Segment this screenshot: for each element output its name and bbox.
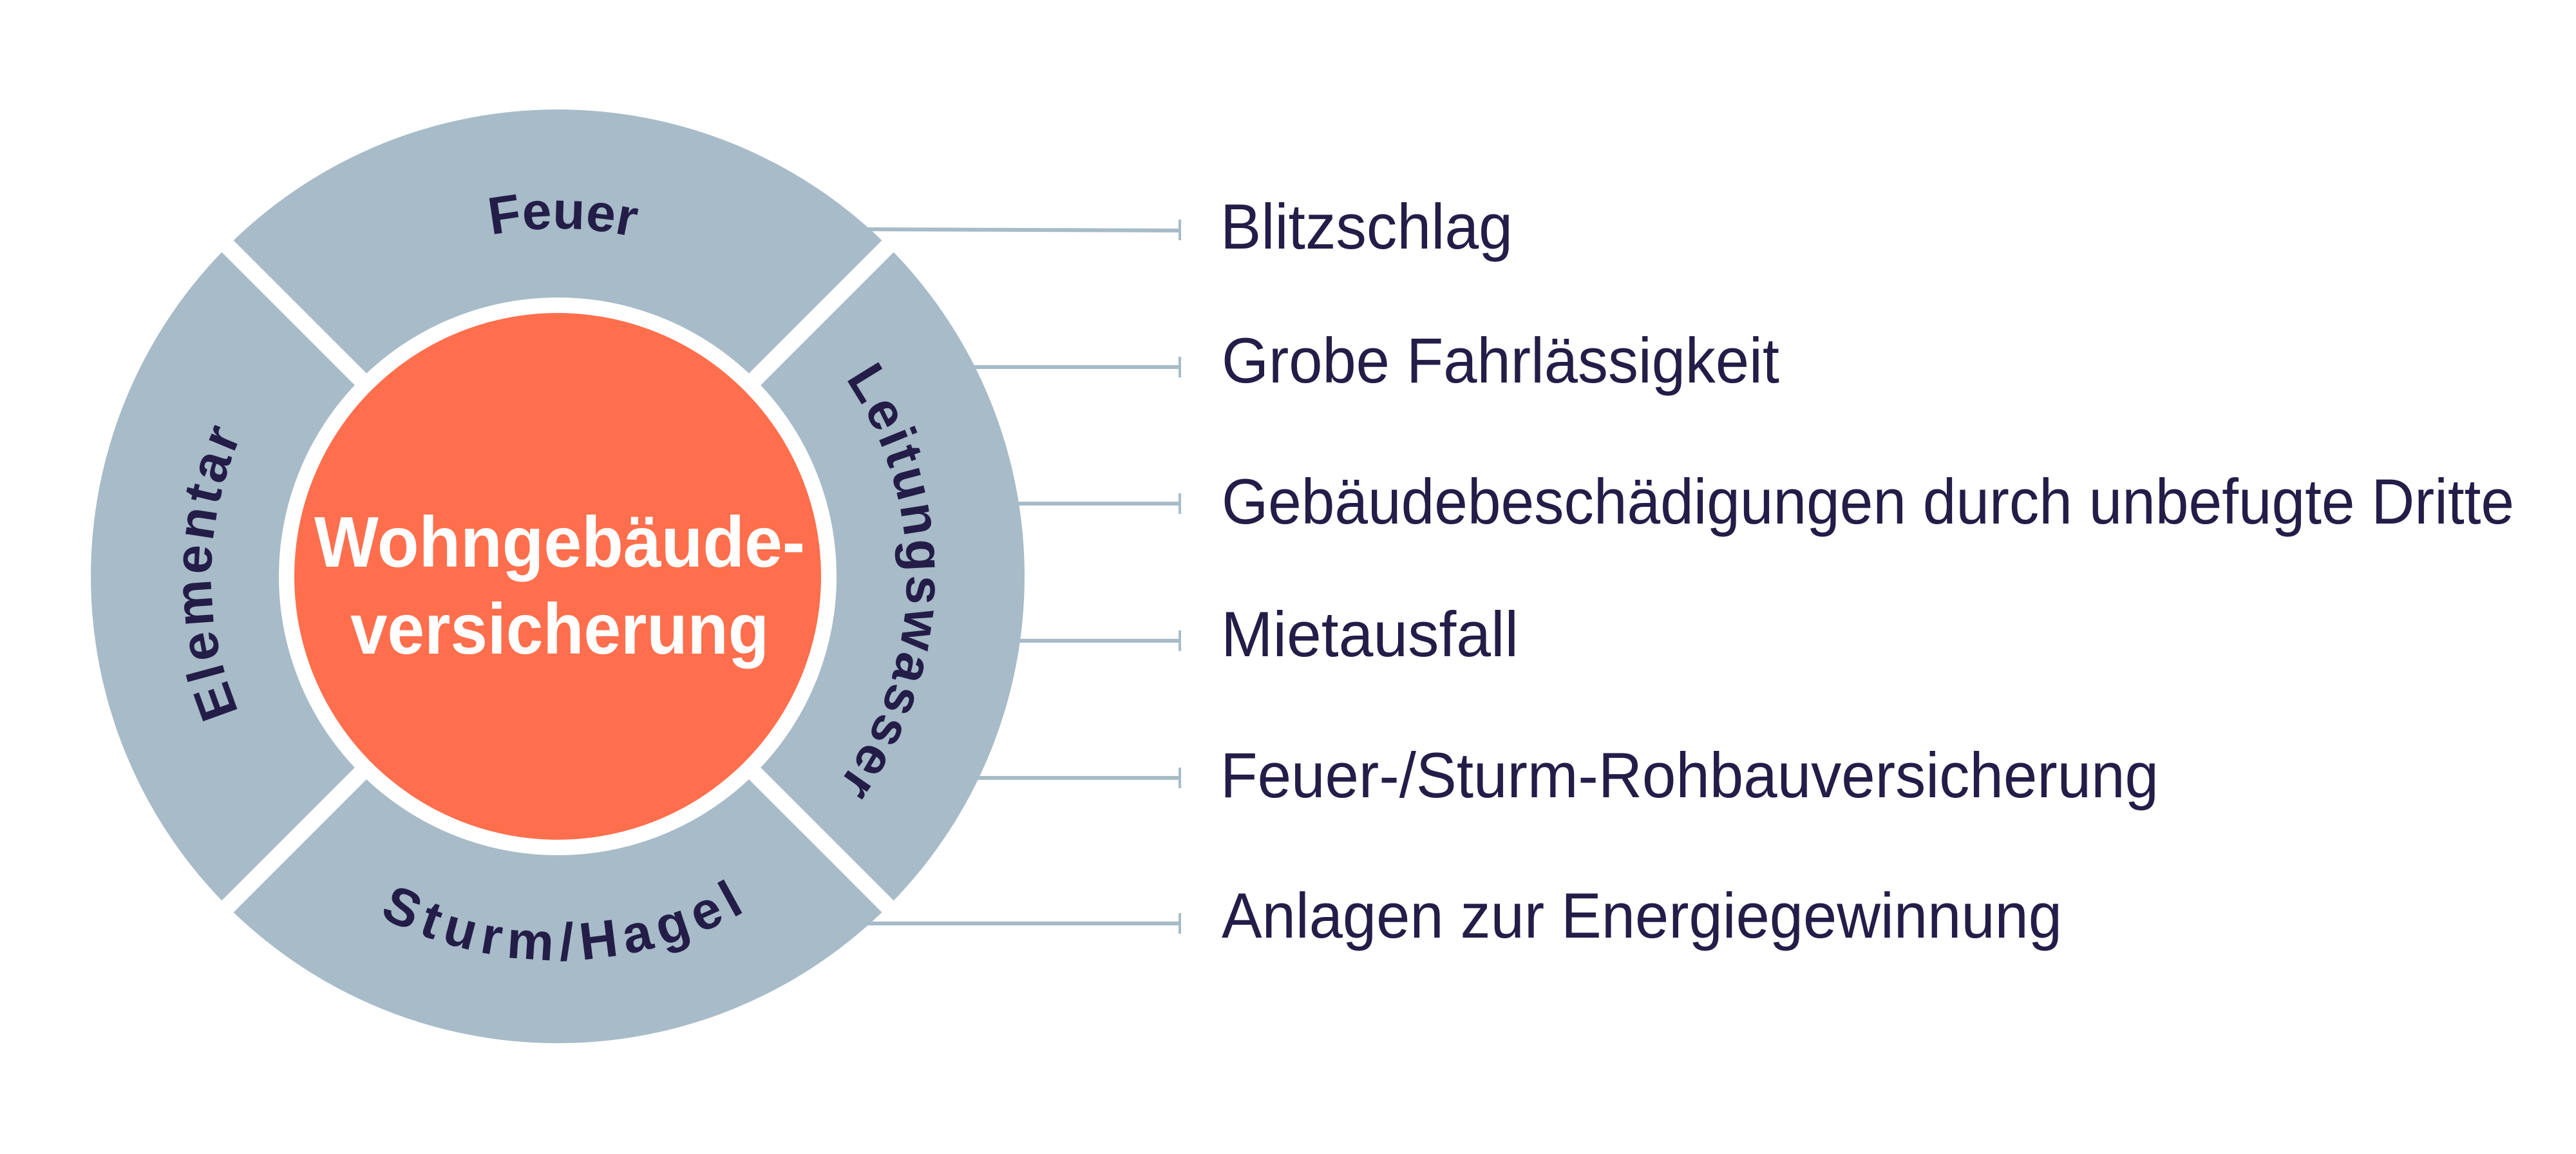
list item: Feuer-/Sturm-Rohbauversicherung: Feuer-/Sturm-Rohbauversicherung — [1220, 739, 2159, 811]
list item: Anlagen zur Energiegewinnung: Anlagen zur Energiegewinnung — [1222, 880, 2062, 951]
center title: versicherung — [350, 589, 769, 669]
ring segments — [91, 109, 1025, 1043]
segment: Elementar — [91, 252, 355, 900]
list item: Gebäudebeschädigungen durch unbefugte Dritte: Gebäudebeschädigungen durch unbefugte Dritte — [1222, 466, 2514, 537]
connector: Blitzschlag — [857, 220, 1181, 240]
coverage list — [1220, 191, 2514, 951]
connector: Gebäudebeschädigungen — [1011, 493, 1181, 514]
connector lines — [857, 220, 1181, 934]
connector: Grobe Fahrlässigkeit — [966, 357, 1181, 377]
center title — [314, 502, 805, 669]
list item: Grobe Fahrlässigkeit: Grobe Fahrlässigkeit — [1222, 325, 1779, 396]
ring label: Leitungswasser: Leitungswasser — [844, 362, 935, 800]
segment: Feuer — [234, 109, 882, 374]
center title: Wohngebäude- — [314, 502, 805, 582]
list item: Blitzschlag: Blitzschlag — [1220, 191, 1513, 262]
connector: Anlagen zur Energiegewinnung — [857, 913, 1181, 934]
segment: Sturm/Hagel — [234, 779, 882, 1043]
ring label: Feuer: Feuer — [489, 194, 639, 235]
center circle — [294, 313, 821, 840]
ring label: Sturm/Hagel: Sturm/Hagel — [384, 880, 742, 961]
connector: Mietausfall — [1011, 630, 1181, 651]
list item: Mietausfall: Mietausfall — [1221, 598, 1519, 670]
connector: Feuer-/Sturm-Rohbauversicherung — [966, 768, 1181, 788]
ring label: Elementar: Elementar — [183, 425, 238, 721]
segment: Leitungswasser — [761, 252, 1025, 900]
